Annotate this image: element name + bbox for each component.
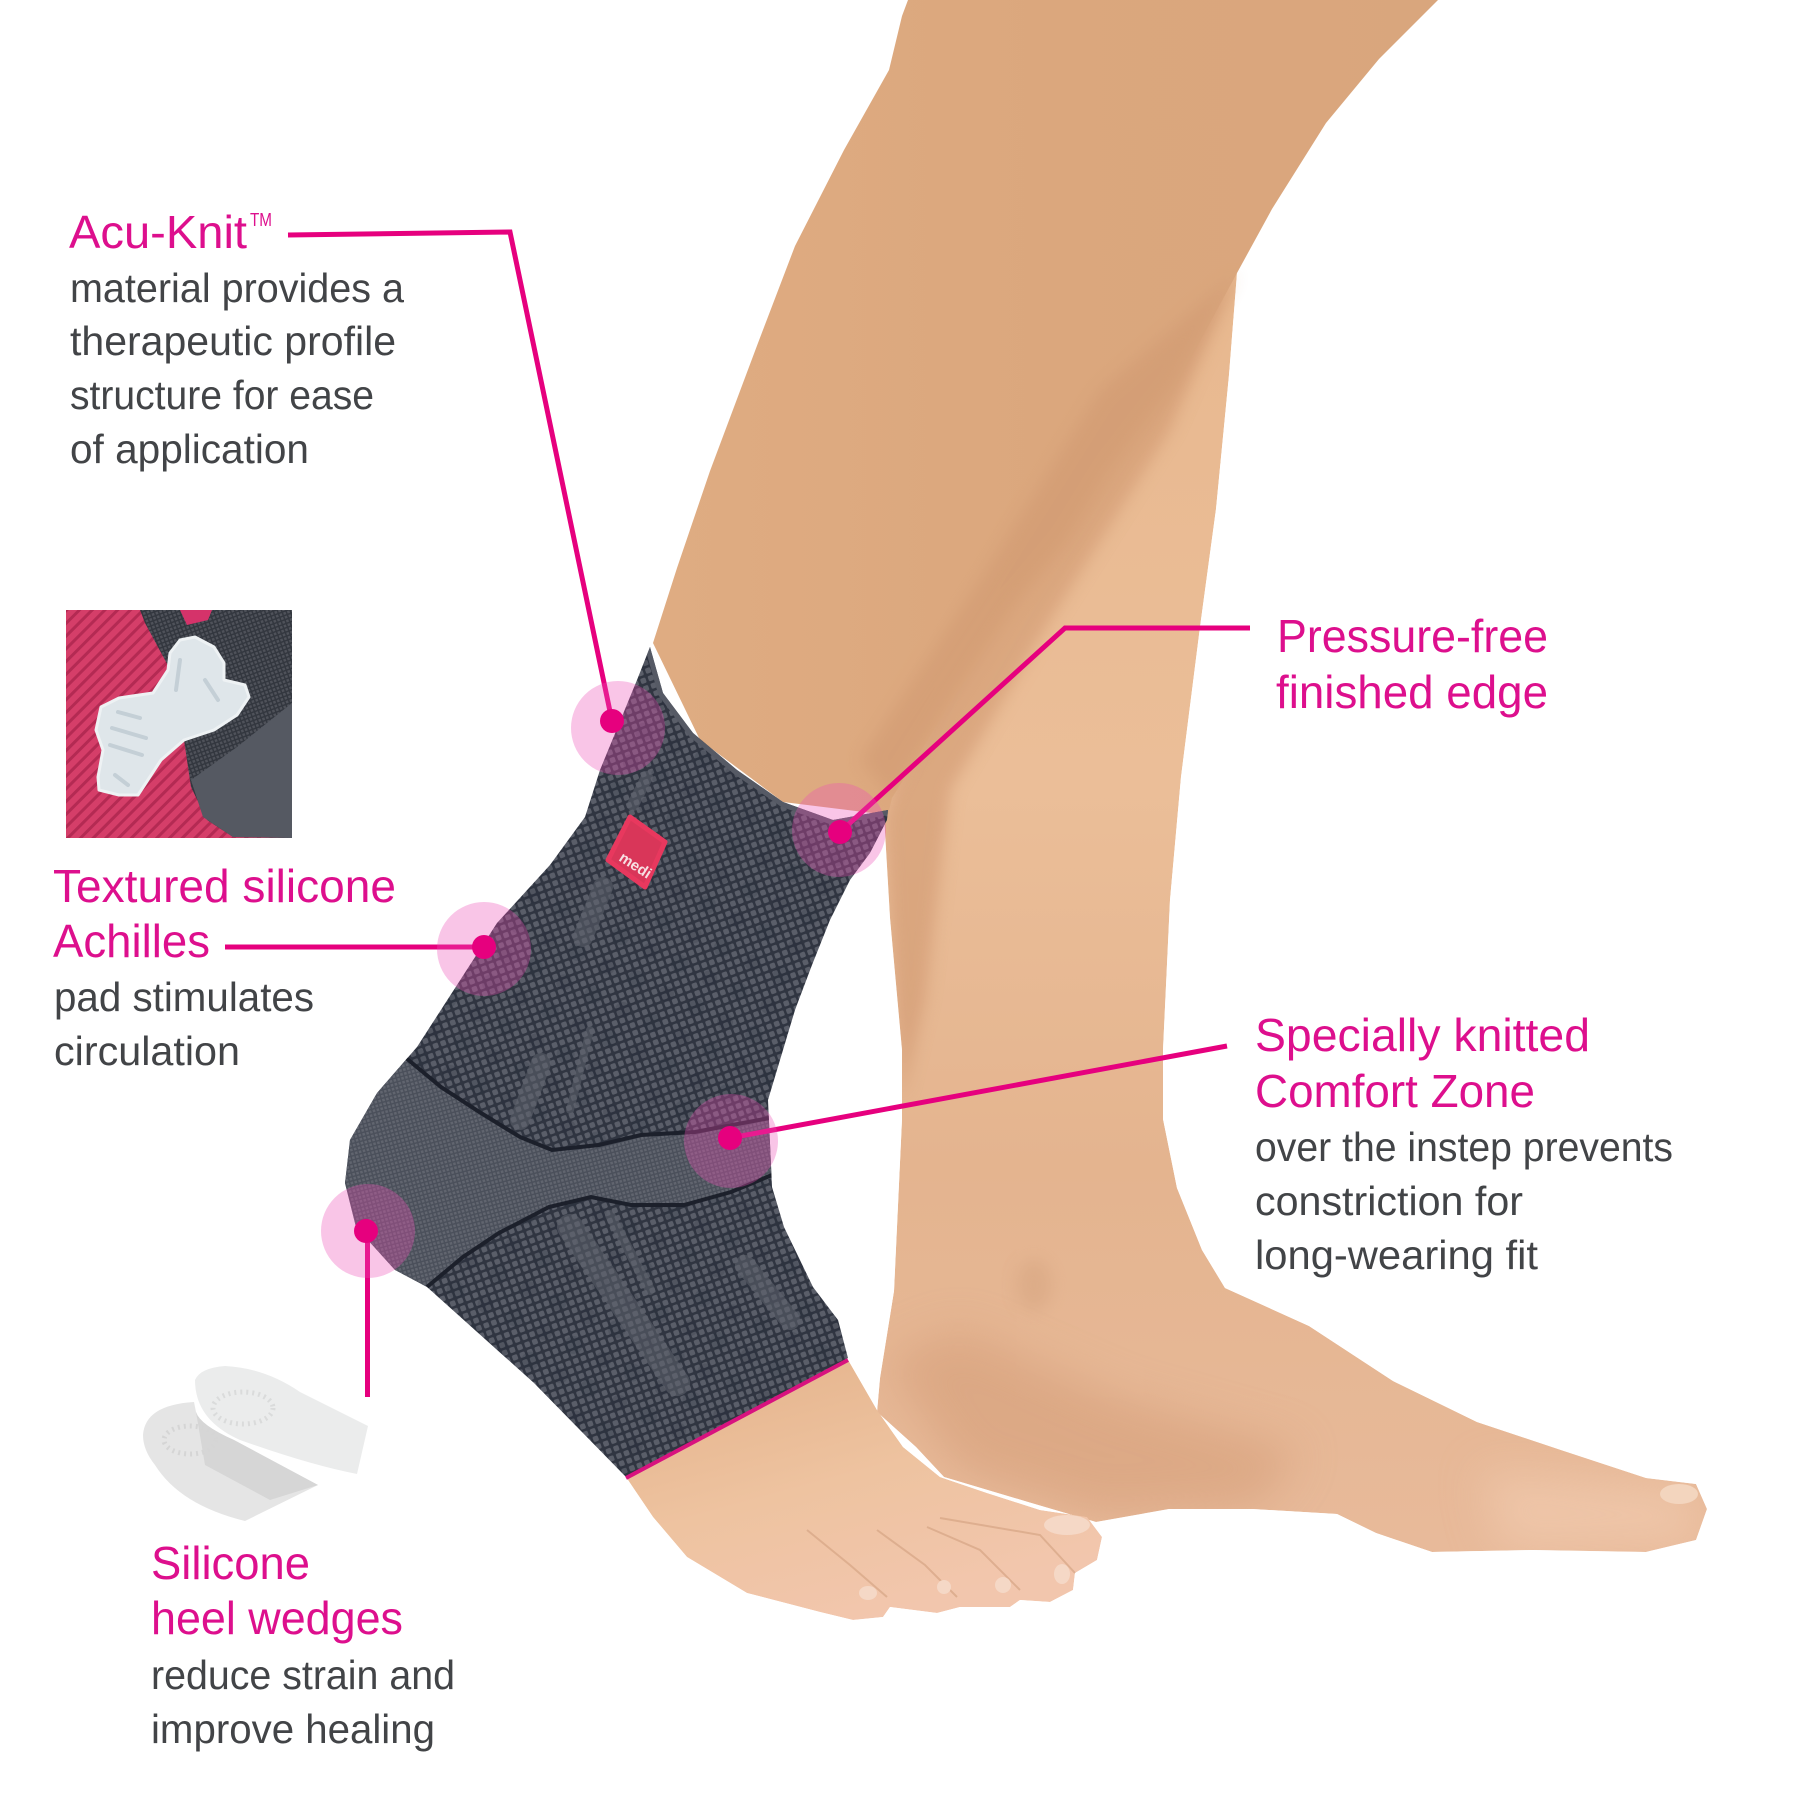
pink bottom edge bbox=[626, 1360, 848, 1478]
comfort zone band bbox=[340, 1058, 780, 1287]
toe lightening bbox=[1494, 1477, 1688, 1546]
pink textured background bbox=[66, 610, 292, 838]
pad ridges bbox=[110, 660, 218, 785]
heading bbox=[53, 860, 396, 967]
lower wedge bbox=[143, 1402, 318, 1521]
body text: structure for ease bbox=[70, 372, 374, 418]
callout: achilles pad bbox=[53, 860, 531, 1074]
body text: of application bbox=[70, 426, 309, 472]
toenail bbox=[1660, 1484, 1698, 1504]
front leg bbox=[653, 0, 1438, 815]
marker halo bbox=[571, 681, 665, 775]
heading bbox=[151, 1537, 403, 1644]
body text: over the instep prevents bbox=[1255, 1124, 1673, 1170]
marker halo bbox=[684, 1094, 778, 1188]
brace knit body bbox=[345, 647, 888, 1477]
callout: heel wedges bbox=[151, 1184, 455, 1752]
toe separations bbox=[807, 1518, 1075, 1597]
body text bbox=[1255, 1124, 1673, 1278]
callout: finished edge bbox=[792, 610, 1548, 877]
heading: Textured silicone bbox=[53, 860, 396, 912]
marker halo bbox=[792, 783, 886, 877]
seams bbox=[406, 1058, 775, 1287]
body text: constriction for bbox=[1255, 1178, 1523, 1224]
body text: circulation bbox=[54, 1028, 240, 1074]
knit ribs bbox=[520, 777, 790, 1383]
heading: Specially knitted bbox=[1255, 1009, 1590, 1061]
leader line bbox=[840, 628, 1250, 832]
wedge dot rings bbox=[213, 1392, 273, 1424]
heading: Silicone bbox=[151, 1537, 310, 1589]
brand tag: medi bbox=[616, 849, 654, 882]
body text bbox=[54, 974, 314, 1074]
trademark: TM bbox=[250, 210, 272, 230]
ankle brace bbox=[340, 640, 900, 1490]
brand tag bbox=[608, 817, 665, 887]
marker halo bbox=[437, 902, 531, 996]
upper wedge bbox=[195, 1366, 368, 1474]
leader line bbox=[365, 1231, 370, 1397]
heel and sole shade bbox=[885, 1330, 1300, 1515]
heading: Acu-Knit bbox=[69, 206, 247, 258]
marker dot bbox=[600, 709, 624, 733]
heading bbox=[1255, 1009, 1590, 1117]
top cuff bbox=[650, 647, 888, 820]
heading: heel wedges bbox=[151, 1592, 403, 1644]
dark brace in photo bbox=[140, 610, 292, 838]
leader line bbox=[225, 944, 484, 950]
body text: long-wearing fit bbox=[1255, 1232, 1539, 1278]
body text: material provides a bbox=[70, 265, 404, 311]
ankle bone bbox=[1024, 1270, 1045, 1302]
leader line bbox=[288, 232, 612, 721]
marker halo bbox=[321, 1184, 415, 1278]
crease shadow bbox=[860, 273, 1237, 798]
body text: reduce strain and bbox=[151, 1652, 455, 1698]
marker dot bbox=[354, 1219, 378, 1243]
back leg and foot bbox=[877, 273, 1707, 1552]
silicone pad bbox=[96, 637, 249, 795]
red tag bbox=[180, 610, 212, 625]
marker dot bbox=[828, 820, 852, 844]
callout: acu-knit bbox=[69, 206, 665, 775]
callout: comfort zone bbox=[684, 1009, 1673, 1278]
lighter comfort band in photo bbox=[191, 703, 292, 838]
marker dot bbox=[718, 1126, 742, 1150]
body text bbox=[151, 1652, 455, 1752]
inset photo: silicone pad bbox=[66, 610, 292, 838]
body text: therapeutic profile bbox=[70, 318, 396, 364]
heading bbox=[1276, 610, 1548, 718]
body text: improve healing bbox=[151, 1706, 435, 1752]
heading: Comfort Zone bbox=[1255, 1065, 1535, 1117]
heading: Achilles bbox=[53, 915, 210, 967]
dark speckles bbox=[412, 655, 888, 1474]
heading: Pressure-free bbox=[1277, 610, 1548, 662]
shade along the crease bbox=[884, 273, 1237, 1100]
toenails bbox=[859, 1515, 1090, 1600]
body text bbox=[70, 265, 404, 472]
front foot bbox=[626, 1358, 1102, 1620]
leader line bbox=[730, 1046, 1227, 1138]
marker dot bbox=[472, 935, 496, 959]
body text: pad stimulates bbox=[54, 974, 314, 1020]
lower wedge shade bbox=[196, 1412, 318, 1500]
silicone heel wedges bbox=[143, 1366, 368, 1521]
heading: finished edge bbox=[1276, 666, 1548, 718]
